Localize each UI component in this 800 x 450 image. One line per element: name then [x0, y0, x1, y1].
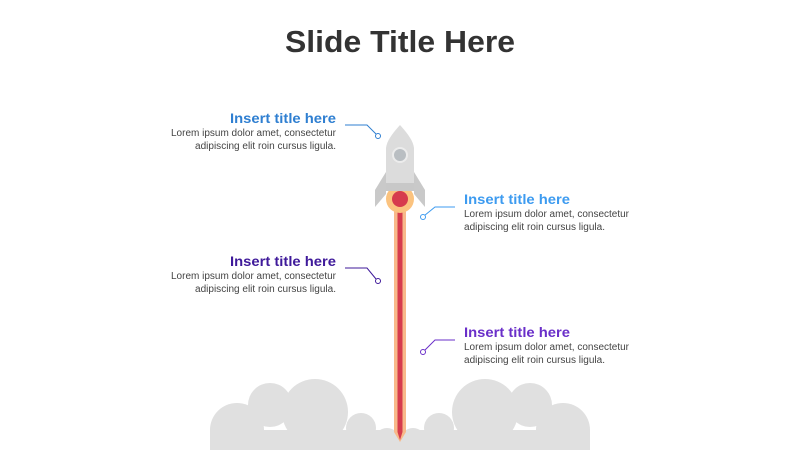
rocket trail: [394, 199, 406, 442]
connector 4: [420, 340, 455, 354]
text block 4: Lorem ipsum dolor amet, consectetur: [464, 342, 630, 353]
text block 1: Lorem ipsum dolor amet, consectetur: [171, 128, 337, 139]
text block 4: [464, 324, 630, 366]
text block 1: [171, 110, 337, 152]
rocket flame: [386, 185, 414, 213]
text block 2: adipiscing elit roin cursus ligula.: [464, 222, 605, 233]
connector 2: [420, 207, 455, 220]
text block 2: Lorem ipsum dolor amet, consectetur: [464, 209, 630, 220]
title: Slide Title Here: [285, 24, 515, 59]
icon: rocket: [375, 125, 425, 207]
connector 3: [345, 268, 380, 284]
text block 3: adipiscing elit roin cursus ligula.: [195, 284, 336, 295]
text block 1: adipiscing elit roin cursus ligula.: [195, 141, 336, 152]
text block 4: adipiscing elit roin cursus ligula.: [464, 355, 605, 366]
text block 1: Insert title here: [230, 110, 336, 126]
text block 3: Insert title here: [230, 253, 336, 269]
clouds: [210, 379, 590, 450]
text block 4: Insert title here: [464, 324, 570, 340]
text block 2: Insert title here: [464, 191, 570, 207]
text block 3: [171, 253, 337, 295]
connector 1: [345, 125, 380, 138]
text block 3: Lorem ipsum dolor amet, consectetur: [171, 271, 337, 282]
text block 2: [464, 191, 630, 233]
